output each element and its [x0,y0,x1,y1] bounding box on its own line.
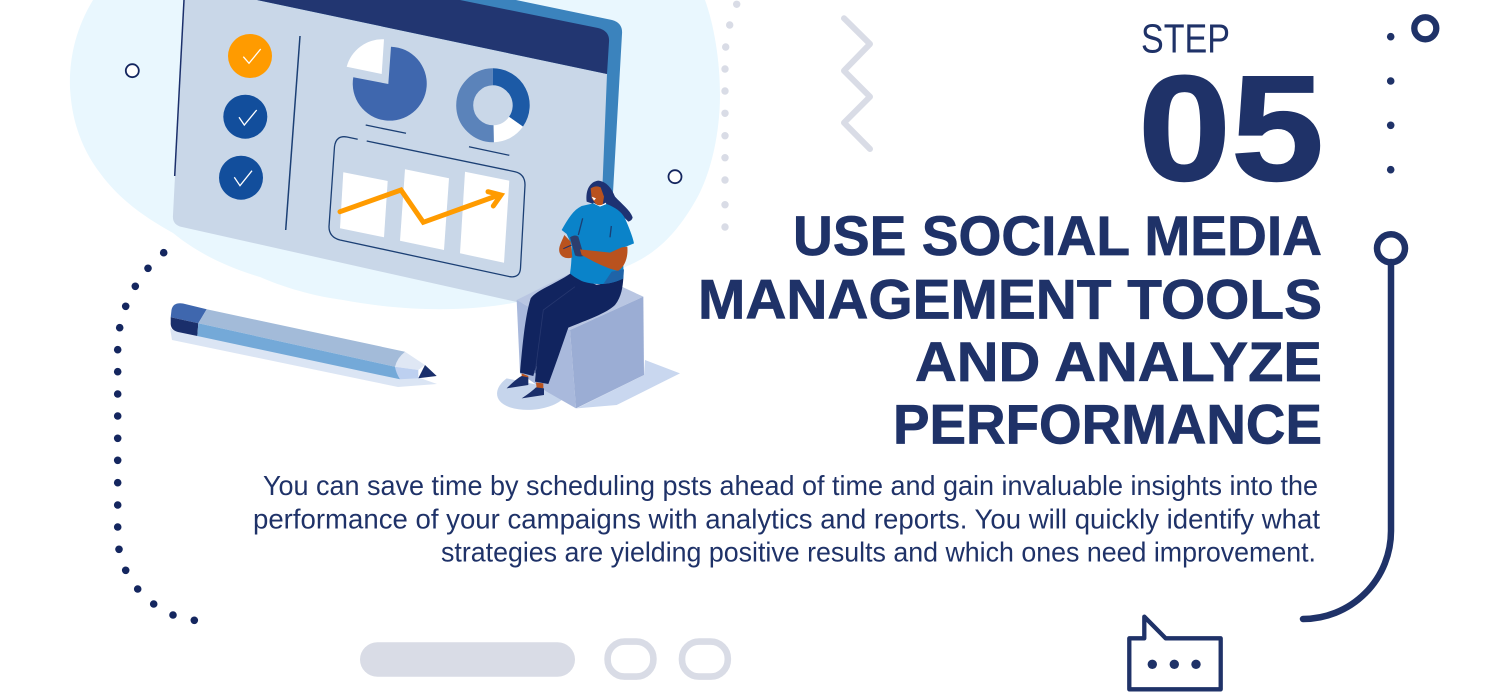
body text: You can save time by scheduling psts ahead of time and gain invaluable insights into the [263,470,1318,501]
icon: blue check 2 [219,156,263,200]
face [591,186,604,205]
body text [253,470,1320,568]
monitor [173,0,622,320]
icon: speech bubble [1129,617,1221,689]
monitor screen [173,0,607,320]
heading: MANAGEMENT TOOLS [698,267,1322,330]
small ring right [668,170,682,183]
trend arrow [340,190,501,222]
pencil [170,303,437,387]
navy dotted arc [114,249,198,624]
grey dotted column [721,1,740,231]
shoes [507,376,544,398]
heading [698,204,1322,456]
right arm [580,247,628,271]
collar [593,203,607,210]
bottom pill filled [360,642,575,677]
ankles [522,373,543,388]
phone [570,235,584,257]
donut chart [465,77,521,155]
zigzag decoration [844,18,870,149]
vertical dots [1387,33,1394,174]
trousers [520,273,623,384]
sidebar divider [286,36,300,230]
icon: orange check [228,34,272,78]
bar and line chart [329,137,525,277]
foot shadow [497,378,562,410]
bottom pill outline 2 [682,642,728,677]
heading: USE SOCIAL MEDIA [793,204,1322,267]
icon: blue check 1 [223,95,267,139]
monitor frame [257,0,622,215]
smile [592,197,596,201]
screen left edge line [175,0,184,176]
shirt shade [603,269,624,284]
stylus [563,245,572,249]
hair [586,181,633,222]
body text: strategies are yielding positive results and which ones need improvement. [441,537,1316,568]
left arm [559,235,572,258]
seated person on block [497,181,680,410]
bottom pill outline 1 [608,642,653,677]
chart frame [329,137,525,277]
background blob [70,0,720,309]
block [517,273,644,408]
bars [340,169,509,263]
trouser seams [535,287,575,373]
heading: AND ANALYZE [915,330,1322,393]
block shadow [577,360,680,408]
step label: STEP [1141,16,1230,62]
top right ring [1414,17,1436,39]
timeline connector [1303,234,1405,619]
pie chart [347,39,427,133]
monitor title bar [257,0,609,74]
small ring left [126,64,139,77]
heading: PERFORMANCE [893,393,1322,456]
shirt [562,203,634,284]
body text: performance of your campaigns with analytics and reports. You will quickly identify what [253,503,1320,534]
step number: 05 [1138,44,1324,212]
shirt folds [578,218,611,237]
